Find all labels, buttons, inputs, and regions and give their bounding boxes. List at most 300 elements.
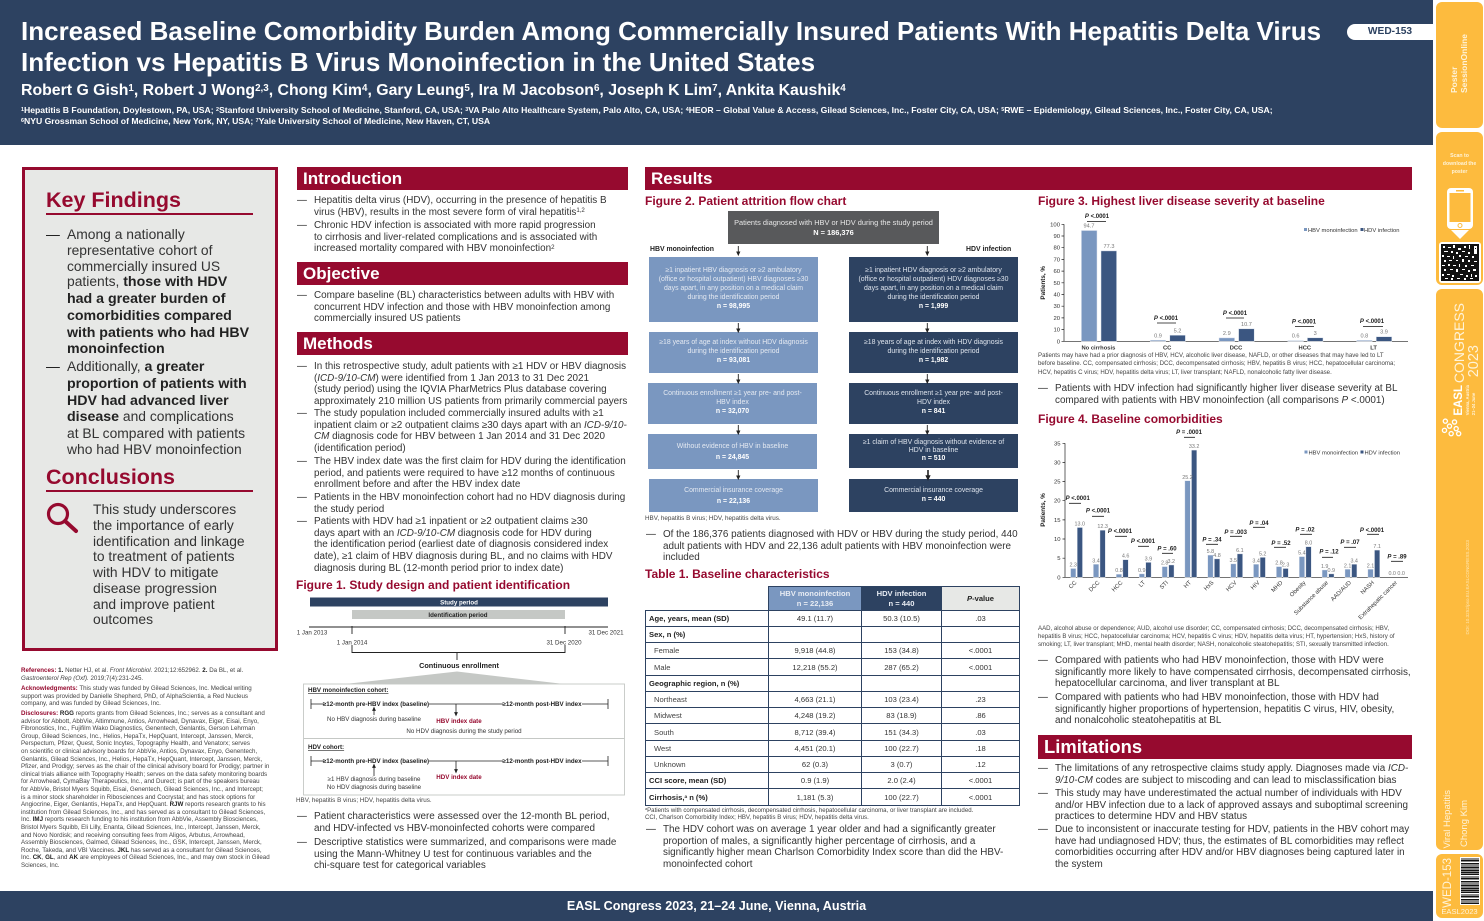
category labels: HCC (1111, 580, 1125, 593)
data labels: 5.4 (1298, 551, 1306, 557)
limitation 2: — (1038, 788, 1048, 799)
row: northeast (654, 695, 986, 704)
data labels: 10.7 (1241, 322, 1252, 328)
p values: P <.0001 (1360, 319, 1385, 325)
flow: HDV step 5: n = 440 (922, 496, 945, 502)
flow: HBV step 2: during the identification period (688, 348, 779, 355)
arrow HBV 2 (737, 374, 740, 383)
HDV cohort: ≥12-month pre-HDV index (baseline) (323, 758, 429, 765)
legend (1304, 450, 1400, 456)
objective text: commercially insured US patients (314, 313, 461, 324)
y axis labels: 15 (1054, 518, 1061, 524)
disclosures: Bristol Myers Squibb, Eli Lilly, Enanta, Gilead Sciences, Inc., Intercept, Janssen, Merck, (21, 824, 261, 831)
flow: HDV step 2: during the identification period (888, 348, 979, 355)
disclosures: Sciences, Inc. (21, 862, 60, 869)
data labels: 3.5 (1230, 558, 1237, 564)
y axis labels: 50 (1053, 281, 1061, 287)
key finding 2: who had HBV monoinfection (67, 441, 242, 457)
limitation 3: the system (1055, 859, 1103, 870)
key finding 2: Additionally, a greater (67, 358, 204, 375)
timeline dates: 31 Dec 2020 (546, 640, 582, 646)
category labels: CC (1068, 580, 1079, 590)
timeline dates (297, 630, 624, 646)
figure 4 interpretation 2: Compared with patients who had HBV monoinfection, those with HDV had (1055, 692, 1379, 703)
category labels: HxS (1203, 580, 1215, 592)
legend: HBV monoinfection (1308, 450, 1358, 456)
methods bullet 5: date), ≥1 claim of HBV diagnosis during BL, and no claims with HDV (314, 551, 613, 562)
table header row: n = 440 (889, 598, 914, 608)
acknowledgments (21, 685, 252, 707)
section heading: introduction: Introduction (303, 169, 402, 188)
flow: HDV step 1: n = 1,999 (919, 303, 948, 310)
flow: HDV step 5 (849, 479, 1018, 512)
methods analysis bullet 1: — (297, 811, 307, 822)
category labels: CC (1163, 346, 1172, 352)
p values: P <.0001 (1154, 316, 1179, 322)
key finding 1 (46, 226, 249, 357)
flow: HBV step 1 (649, 257, 818, 322)
methods analysis bullet 1: and HDV-infected vs HBV-monoinfected cohorts were compared (314, 823, 595, 834)
flow: HDV column label: HDV infection (966, 246, 1011, 253)
data labels: 0.8 (1115, 568, 1123, 574)
figure 3 footnote: Patients may have had a prior diagnosis of HBV, HCV, alcoholic liver disease, NAFLD, or other diseases that may have led to LT (1038, 352, 1384, 359)
category labels: NASH (1360, 580, 1376, 596)
flow: HDV step 4: HDV in baseline (909, 447, 958, 454)
row: west: 100 (22.7) (884, 744, 919, 753)
flow: HDV step 1: ≥1 inpatient HDV diagnosis or ≥2 ambulatory (865, 267, 1002, 274)
congress location: 21–24 June (1471, 393, 1476, 415)
disclosures: Inc. CK, GL, and AK are employees of Gilead Sciences, Inc., and may own stock in Gilead (21, 854, 270, 861)
data labels: 3.2 (1168, 559, 1175, 565)
HBV monoinfection cohort (308, 687, 608, 735)
data labels: 0.9 (1154, 334, 1162, 340)
figure 4 footnote: AAD, alcohol abuse or dependence; AUD, alcohol use disorder; CC, compensated cirrhosis; DCC, decompensated cirrhosis; HBV, (1038, 625, 1389, 632)
authors: Robert G Gish1, Robert J Wong2,3, Chong Kim4, Gary Leung5, Ira M Jacobson6, Joseph K Lim7, Ankita Kaushik4 (21, 82, 846, 99)
methods analysis bullet 1: Patient characteristics were assessed over the 12-month BL period, (314, 811, 609, 822)
row: south: .03 (975, 728, 986, 736)
conclusion text (93, 501, 245, 627)
y axis labels: 20 (1054, 499, 1061, 505)
limitation 3 (1038, 824, 1409, 871)
section heading: limitations (1038, 735, 1412, 759)
flow: top box (728, 211, 939, 244)
flow: HDV step 1: (office or hospital outpatient) HDV diagnoses ≥30 (858, 276, 1008, 283)
flow: HDV step 1: during the identification period (888, 294, 979, 301)
flow: HBV step 5: n = 22,136 (717, 498, 750, 504)
HDV cohort (308, 744, 608, 791)
barcode (1460, 857, 1480, 905)
HDV cohort: ≥1 HBV diagnosis during baseline (328, 776, 421, 783)
category labels: HIV (1250, 580, 1261, 591)
category labels: Substance abuse (1293, 580, 1330, 617)
footer banner (0, 891, 1433, 921)
results paragraph: attrition: — (646, 529, 656, 540)
row: male: 287 (65.2) (884, 662, 919, 672)
y axis labels: 30 (1054, 460, 1061, 466)
HDV cohort: HDV cohort: (308, 744, 344, 751)
key finding 1: commercially insured US (67, 258, 220, 274)
intro bullet 1: Hepatitis delta virus (HDV), occurring in the presence of hepatitis B (314, 195, 607, 206)
flow: HBV step 2: ≥18 years of age at index without HDV diagnosis (659, 339, 808, 346)
references: Gastroenterol Rep (Oxf). 2019;7(4):231-245. (21, 675, 143, 682)
bars: HDV infection (1077, 450, 1380, 577)
data labels: 0.0 0.0 (1388, 571, 1405, 577)
p values: P <.0001 (1086, 508, 1111, 514)
heading: conclusions (46, 463, 253, 492)
methods analysis bullet 2: using the Mann-Whitney U test for continuous variables and the (314, 849, 592, 860)
sidebar: QR download tab (1436, 132, 1483, 285)
row: age: .03 (975, 614, 986, 623)
limitation 2 (1038, 788, 1408, 823)
row: unknown: Unknown (654, 760, 686, 769)
row: northeast: 4,663 (21.1) (795, 695, 835, 704)
logo text (1449, 34, 1469, 93)
data labels: 2.3 (1282, 562, 1289, 568)
legend: HBV monoinfection (1308, 228, 1358, 234)
continuous enrollment label: Continuous enrollment (419, 661, 499, 670)
objective text: Compare baseline (BL) characteristics between adults with HBV with (314, 290, 614, 301)
table 1 interpretation: monoinfected cohort (663, 859, 752, 870)
methods bullet 2: The study population included commercially insured adults with ≥1 (314, 408, 604, 419)
flow: HBV step 3: HBV index (716, 399, 749, 406)
row: male: 12,218 (55.2) (792, 662, 838, 672)
p values: P = .02 (1295, 528, 1315, 534)
intro bullet 2: increased mortality compared with HBV monoinfection2 (314, 243, 555, 254)
category labels: HT (1183, 580, 1193, 590)
disclosures: Pfizer, and Prodigy; serves as the chair of the clinical advisory board for Prodigy; partner in (21, 763, 269, 770)
congress location: Vienna, Austria (1465, 385, 1470, 415)
row: northeast: 103 (23.4) (884, 695, 919, 704)
data labels: 7.1 (1373, 544, 1381, 550)
row: midwest: .86 (975, 711, 986, 720)
data labels: 0.9 (1138, 568, 1146, 574)
p values: P = .60 (1157, 546, 1177, 552)
figure 4 interpretation 1: hepatocellular carcinoma, and liver transplant at BL (1055, 678, 1280, 689)
figure 1: study design timeline (297, 598, 625, 796)
flow: HBV step 1: ≥1 inpatient HBV diagnosis or ≥2 ambulatory (665, 267, 802, 274)
disclosures: Fibronostics, Inc., Fujifilm Wako Diagnostics, Genentech, Genlantis, Gerson Lehrman (21, 725, 255, 732)
figure 4 interpretation 2 (1038, 692, 1394, 727)
key finding 2: — (46, 358, 60, 374)
legend: HDV infection (1364, 228, 1399, 234)
scan text: download the (1443, 161, 1476, 167)
table header row: n = 22,136 (797, 598, 833, 608)
p values: P <.0001 (1223, 311, 1248, 317)
intro bullet 1 (297, 195, 607, 218)
data labels: 0.8 (1361, 334, 1368, 340)
figure 4 interpretation 2: and nonalcoholic steatohepatitis at BL (1055, 715, 1221, 726)
key finding 2: at BL compared with patients (67, 425, 245, 441)
table header row (769, 587, 1019, 610)
data labels: 2.8 (1275, 561, 1283, 567)
methods analysis bullet 2: chi-square test for categorical variables (314, 860, 486, 871)
data labels: 4.8 (1213, 553, 1221, 559)
row: female: 9,918 (44.8) (795, 646, 835, 655)
y axis labels: 0 (1057, 339, 1061, 345)
row: unknown (646, 756, 1020, 772)
y axis labels: 30 (1053, 304, 1061, 310)
p values: P = .12 (1319, 550, 1339, 556)
key finding 1: — (46, 226, 60, 242)
flow: HDV step 1 (849, 257, 1018, 322)
disclosures: Disclosures: RGG reports grants from Gilead Sciences, Inc.; serves as a consultant and (21, 710, 265, 717)
arrow HBV 1 (737, 323, 740, 332)
intro bullet 1: virus (HBV), results in the most severe form of viral hepatitis1,2 (314, 207, 585, 218)
figure 3 interpretation: Patients with HDV infection had significantly higher liver disease severity at BL (1055, 383, 1398, 394)
methods bullet 3: enrollment before and after the HBV index date (314, 479, 520, 490)
row: CCI score: 2.0 (2.4) (887, 776, 916, 785)
flow: top box: Patients diagnosed with HBV or HDV during the study period (734, 218, 933, 226)
disclosures: Assembly Biosciences, Galmed, Gilead Sciences, Inc., GSK, Intercept, Janssen, Merck, (21, 839, 262, 846)
methods bullet 2: CM diagnosis code for HBV between 1 Jan 2014 and 31 Dec 2020 (314, 431, 605, 442)
limitation 3: comorbidities occurring after HDV and/or HBV diagnoses being captured later in (1055, 847, 1405, 858)
row: age (649, 614, 986, 623)
table header row: HBV monoinfection (780, 589, 850, 598)
flow: HBV step 1: (office or hospital outpatient) HBV diagnoses ≥30 (659, 276, 808, 283)
limitation 1: The limitations of any retrospective claims study apply. Diagnoses made via ICD- (1055, 763, 1408, 774)
figure 3: bar chart (1038, 210, 1412, 352)
conclusion text: to treatment of patients (93, 548, 235, 564)
y axis labels: 25 (1054, 480, 1061, 486)
intro bullet 2: Chronic HDV infection is associated with more rapid progression (314, 220, 596, 231)
row: geographic region: Geographic region, n (%) (649, 679, 739, 688)
enrollment callout wedge (345, 672, 564, 684)
acknowledgments: support was provided by Danielle Shepherd, PhD, of AlphaScientia, a Red Nucleus (21, 693, 248, 700)
row: male (654, 662, 992, 672)
table 1 interpretation (646, 824, 1003, 871)
cohort box (304, 684, 624, 795)
legend (1304, 228, 1399, 234)
section heading: introduction (297, 167, 628, 190)
poster number pill: WED-153 (1368, 26, 1412, 37)
row: midwest: 83 (18.9) (886, 711, 917, 720)
y axis title: Patients, % (1040, 493, 1047, 527)
HDV cohort: No HDV diagnosis during baseline (327, 784, 422, 791)
methods bullet 1: In this retrospective study, adult patients with ≥1 HDV or HBV diagnosis (314, 361, 626, 372)
flow: HBV step 1: during the identification period (688, 294, 779, 301)
arrow HDV 3 (926, 425, 929, 434)
p values (1066, 430, 1407, 560)
category labels: STI (1159, 580, 1170, 591)
key finding 1: representative cohort of (67, 242, 212, 258)
disclosures: institution from Gilead Sciences, Inc., and has served as a consultant to Gilead Sciences, (21, 809, 265, 816)
HBV monoinfection cohort: No HBV diagnosis during baseline (327, 716, 422, 723)
category labels: HCV (1225, 580, 1238, 593)
table 1 footnote (645, 806, 973, 822)
figure 3 footnote: HCV, hepatitis C virus; HDV, hepatitis delta virus; LT, liver transplant; NAFLD, nonalcoholic fatty liver disease. (1038, 369, 1332, 376)
y axis labels: 60 (1053, 269, 1061, 275)
results paragraph: attrition: adult patients with HDV and 22,136 adult patients with HBV monoinfection were (663, 541, 1011, 552)
figure 4 interpretation 1: significantly more likely to have compensated cirrhosis, decompensated cirrhosis, (1055, 667, 1411, 678)
flow: HBV step 4: Without evidence of HBV in baseline (677, 442, 788, 450)
section heading: results (645, 167, 1412, 190)
methods bullet 4: Patients in the HBV monoinfection cohort had no HDV diagnosis during (314, 492, 625, 503)
arrow HBV 4 (737, 470, 740, 479)
limitation 2: practices to determine HDV and HBV status (1055, 811, 1247, 822)
row: northeast: Northeast (654, 695, 687, 704)
figure 4 interpretation 1: Compared with patients who had HBV monoinfection, those with HDV were (1055, 655, 1384, 666)
y axis labels: 90 (1053, 234, 1061, 240)
category labels: AAD/AUD (1330, 580, 1353, 603)
heading: key findings: Key Findings (46, 188, 181, 212)
arrow HBV 3 (737, 425, 740, 434)
data labels: 33.2 (1189, 444, 1199, 450)
row: age: Age, years, mean (SD) (649, 614, 729, 623)
row: CCI score: CCI score, mean (SD) (649, 776, 726, 785)
data labels: 2.1 (1367, 563, 1374, 569)
category labels: Obesity (1289, 580, 1307, 599)
results paragraph: attrition: included (663, 552, 700, 563)
arrow HDV 1 (926, 323, 929, 332)
row: west: West (654, 744, 671, 753)
affiliations: 6NYU Grossman School of Medicine, New York, NY, USA; 7Yale University School of Medicine, New Haven, CT, USA (21, 116, 490, 126)
disclosures: Angiocrine, Eiger, Genlantis, HepaTx, and HepQuant. RJW reports research grants to his (21, 801, 266, 808)
disclosures (21, 710, 270, 869)
data labels: 94.7 (1084, 224, 1094, 230)
congress tag: EASL2023 (1441, 907, 1478, 916)
methods bullet 4 (297, 492, 625, 515)
table header row: HDV infection (877, 589, 926, 598)
row: south (654, 728, 986, 736)
data labels: 2.3 (1069, 562, 1077, 568)
y axis labels: 10 (1053, 328, 1061, 334)
flow: HDV step 4: ≥1 claim of HBV diagnosis without evidence of (863, 439, 1004, 446)
table 1 interpretation: The HDV cohort was on average 1 year older and had a significantly greater (663, 824, 996, 835)
section heading: objective (297, 262, 628, 285)
figure 3 interpretation: — (1038, 383, 1048, 394)
sidebar: congress tab (1436, 289, 1483, 850)
identification period bar (352, 610, 565, 619)
flow: HDV step 2: ≥18 years of age at index with HDV diagnosis (864, 339, 1003, 346)
limitation 3: have had undiagnosed HDV; thus, the estimates of BL comorbidities may reflect (1055, 836, 1404, 847)
congress name: CONGRESS (1451, 303, 1467, 383)
methods analysis bullet 2: — (297, 837, 307, 848)
axes (1062, 224, 1408, 341)
data labels: 5.2 (1174, 328, 1181, 334)
poster number vertical: WED-153 (1442, 858, 1454, 908)
panel: key findings and conclusions (22, 167, 278, 651)
study period bar (310, 598, 608, 606)
data labels: 3.9 (1145, 556, 1152, 562)
figure 2 heading: Figure 2. Patient attrition flow chart (645, 194, 846, 208)
table 1: baseline characteristics (645, 586, 1020, 806)
HDV cohort: HDV index date (436, 774, 482, 781)
category labels: MHD (1271, 580, 1284, 594)
data labels: 5.8 (1207, 549, 1214, 555)
row: female: Female (654, 646, 679, 655)
HBV monoinfection cohort: HBV monoinfection cohort: (308, 687, 388, 694)
key finding 1: monoinfection (67, 341, 165, 357)
limitation 1: — (1038, 763, 1048, 774)
figure 3 heading: Figure 3. Highest liver disease severity at baseline (1038, 194, 1325, 208)
methods bullet 3: — (297, 456, 307, 467)
limitation 2: This study may have underestimated the actual number of individuals with HDV (1055, 788, 1402, 799)
methods bullet 3: The HBV index date was the first claim for HDV during the identification (314, 456, 626, 467)
acknowledgments: Acknowledgments: This study was funded by Gilead Sciences, Inc. Medical writing (21, 685, 252, 692)
methods analysis bullet 2: Descriptive statistics were summarized, and comparisons were made (314, 837, 616, 848)
footer banner: EASL Congress 2023, 21–24 June, Vienna, Austria (567, 899, 866, 913)
arrow HDV 2 (926, 374, 929, 383)
methods bullet 1: approximately 210 million US patients from primarily commercial payers (314, 396, 627, 407)
results paragraph: attrition: Of the 186,376 patients diagnosed with HDV or HBV during the study period, 440 (663, 529, 1018, 540)
section heading: objective: Objective (303, 264, 380, 283)
flow: HBV step 3 (648, 383, 817, 424)
data labels: 2.9 (1223, 331, 1231, 337)
methods bullet 2: inpatient claim or ≥2 outpatient claims ≥30 days apart with an ICD-9/10- (314, 420, 627, 431)
flow: HBV step 3: Continuous enrollment ≥1 year pre- and post- (663, 390, 802, 397)
section heading: methods (297, 332, 628, 355)
data labels (1069, 444, 1405, 577)
figure 2 footnote: HBV, hepatitis B virus; HDV, hepatitis delta virus. (645, 515, 781, 522)
table 1 interpretation: significantly higher mean Charlson Comorbidity Index score than did the HBV- (663, 847, 1003, 858)
methods bullet 2: (identification period) (314, 443, 406, 454)
methods bullet 5: the identification period (earliest date of diagnosis considered index (314, 539, 608, 550)
row: west (646, 740, 1020, 756)
flow: HBV column label: HBV monoinfection (650, 246, 714, 253)
data labels (1084, 224, 1388, 340)
p values: P = .52 (1271, 541, 1291, 547)
flow: HBV step 4 (648, 434, 817, 469)
category labels (1068, 580, 1399, 621)
data labels: 3 (1314, 331, 1317, 337)
poster number pill (1347, 24, 1433, 40)
category labels: DCC (1230, 346, 1243, 352)
intro bullet 1: — (297, 195, 307, 206)
figure 4 footnote: smoking; LT, liver transplant; MHD, mental health disorder; NASH, nonalcoholic steatohepatitis; STI, sexually transmitted infection. (1038, 641, 1389, 648)
HBV monoinfection cohort: ≥12-month pre-HBV index (baseline) (323, 701, 429, 708)
y axis labels: 10 (1054, 537, 1061, 543)
table 1 heading: Table 1. Baseline characteristics (645, 567, 830, 581)
row: age: 50.3 (10.5) (883, 614, 920, 623)
conclusion text: disease progression (93, 580, 217, 596)
disclosures: advisor for Abbott, AbbVie, Altimmune, Antios, Arrowhead, Dynavax, Eiger, Eisai, Enyo, (21, 718, 259, 725)
disclosures: Inc. IMJ reports research funding to his institution from AbbVie, Assembly Biosciences, (21, 816, 258, 823)
row: cirrhosis (646, 788, 1020, 806)
flow: HDV step 5: Commercial insurance coverage (884, 487, 983, 494)
figure 4 interpretation 2: significantly higher proportions of hypertension, hepatitis C virus, HIV, obesity, (1055, 704, 1394, 715)
key finding 2 (46, 358, 247, 457)
conclusion text: outcomes (93, 611, 153, 627)
limitation 1 (1038, 763, 1408, 786)
limitation 2: and/or HBV infection due to a lack of approved assays and suboptimal screening (1055, 800, 1408, 811)
sidebar: barcode tab (1436, 854, 1483, 918)
section heading: limitations: Limitations (1044, 736, 1142, 757)
timeline dates: 1 Jan 2014 (337, 640, 368, 646)
y axis title: Patients, % (1040, 266, 1047, 300)
row: cirrhosis: Cirrhosis,a n (%) (649, 792, 708, 802)
disclosures: is a minor stock shareholder in Ribosciences and Cocrystal; and has stock options for (21, 794, 255, 801)
legend: HDV infection (1364, 450, 1400, 456)
row: CCI score: <.0001 (969, 776, 992, 785)
study period bar: Study period (440, 599, 478, 606)
figure 3 footnote (1038, 352, 1395, 377)
p values: P = .89 (1387, 554, 1407, 560)
intro bullet 2 (297, 220, 597, 254)
data labels: 2.8 (1161, 561, 1168, 567)
methods bullet 1 (297, 361, 627, 407)
y axis labels: 5 (1057, 556, 1061, 562)
flow: HBV step 5 (649, 479, 818, 512)
row: midwest (654, 711, 986, 720)
methods bullet 3 (297, 456, 626, 490)
y axis labels: 0 (1057, 575, 1061, 581)
row: female: <.0001 (969, 646, 992, 655)
row: south: 151 (34.3) (884, 728, 919, 736)
data labels: 3.9 (1380, 330, 1388, 336)
y axis labels (1050, 222, 1061, 345)
row: male: Male (654, 662, 670, 672)
row: cirrhosis: 100 (22.7) (884, 792, 919, 802)
